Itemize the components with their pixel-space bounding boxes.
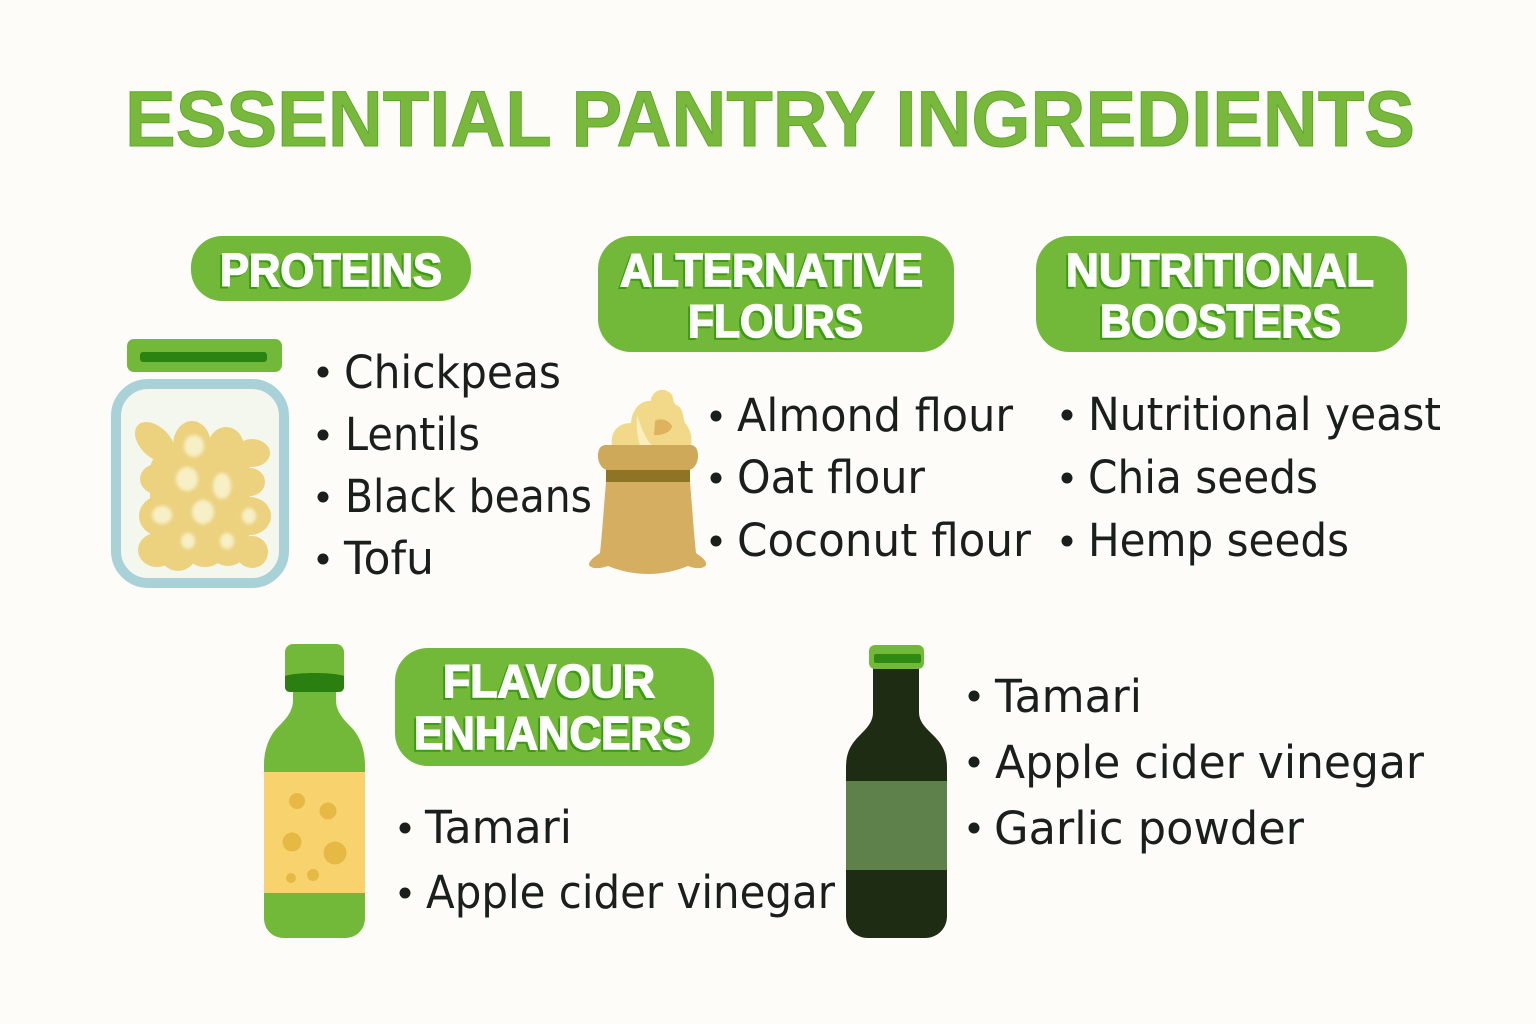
heading: flavour enhancers: ENHANCERS bbox=[414, 707, 691, 759]
title: ESSENTIAL PANTRY INGREDIENTS bbox=[125, 74, 1415, 163]
heading: proteins bbox=[191, 236, 471, 301]
icon: green bottle bbox=[264, 644, 365, 938]
heading: nutritional boosters: BOOSTERS bbox=[1100, 295, 1341, 347]
list: alternative flours: Almond flour bbox=[737, 389, 1013, 442]
list: alternative flours: Oat flour bbox=[737, 451, 925, 504]
list: nutritional boosters: Chia seeds bbox=[1088, 451, 1318, 504]
panel: alternative flours bbox=[589, 236, 1031, 574]
list: flavour enhancers left bbox=[400, 801, 835, 919]
heading: alternative flours: FLOURS bbox=[688, 295, 863, 347]
list: proteins: Black beans bbox=[345, 470, 592, 523]
heading: alternative flours: ALTERNATIVE bbox=[620, 244, 923, 296]
list: flavour enhancers left: Tamari bbox=[424, 801, 572, 854]
list: proteins: Chickpeas bbox=[344, 346, 561, 399]
list: alternative flours bbox=[710, 389, 1031, 567]
heading: nutritional boosters bbox=[1036, 236, 1407, 352]
list: proteins bbox=[318, 346, 592, 585]
icon: jar of chickpeas bbox=[116, 339, 284, 583]
list: nutritional boosters: Nutritional yeast bbox=[1088, 388, 1441, 441]
list: flavour enhancers right: Garlic powder bbox=[994, 802, 1304, 855]
heading: flavour enhancers bbox=[395, 648, 714, 766]
heading: flavour enhancers: FLAVOUR bbox=[443, 655, 655, 707]
icon: dark bottle bbox=[846, 645, 947, 938]
list: flavour enhancers right bbox=[968, 670, 1424, 855]
heading: nutritional boosters: NUTRITIONAL bbox=[1066, 244, 1374, 296]
list: nutritional boosters: Hemp seeds bbox=[1088, 514, 1349, 567]
list: proteins: Lentils bbox=[345, 408, 480, 461]
heading: proteins: PROTEINS bbox=[220, 244, 442, 296]
list: alternative flours: Coconut flour bbox=[737, 514, 1031, 567]
heading: alternative flours bbox=[598, 236, 954, 352]
list: flavour enhancers right: Apple cider vinegar bbox=[995, 736, 1424, 789]
panel: nutritional boosters bbox=[1036, 236, 1441, 567]
icon: flour sack bbox=[589, 390, 706, 574]
list: proteins: Tofu bbox=[343, 532, 434, 585]
panel: proteins bbox=[116, 236, 592, 585]
list: flavour enhancers right: Tamari bbox=[994, 670, 1142, 723]
list: flavour enhancers left: Apple cider vinegar bbox=[426, 866, 835, 919]
list: nutritional boosters bbox=[1062, 388, 1441, 567]
panel: flavour enhancers bbox=[264, 644, 1424, 938]
